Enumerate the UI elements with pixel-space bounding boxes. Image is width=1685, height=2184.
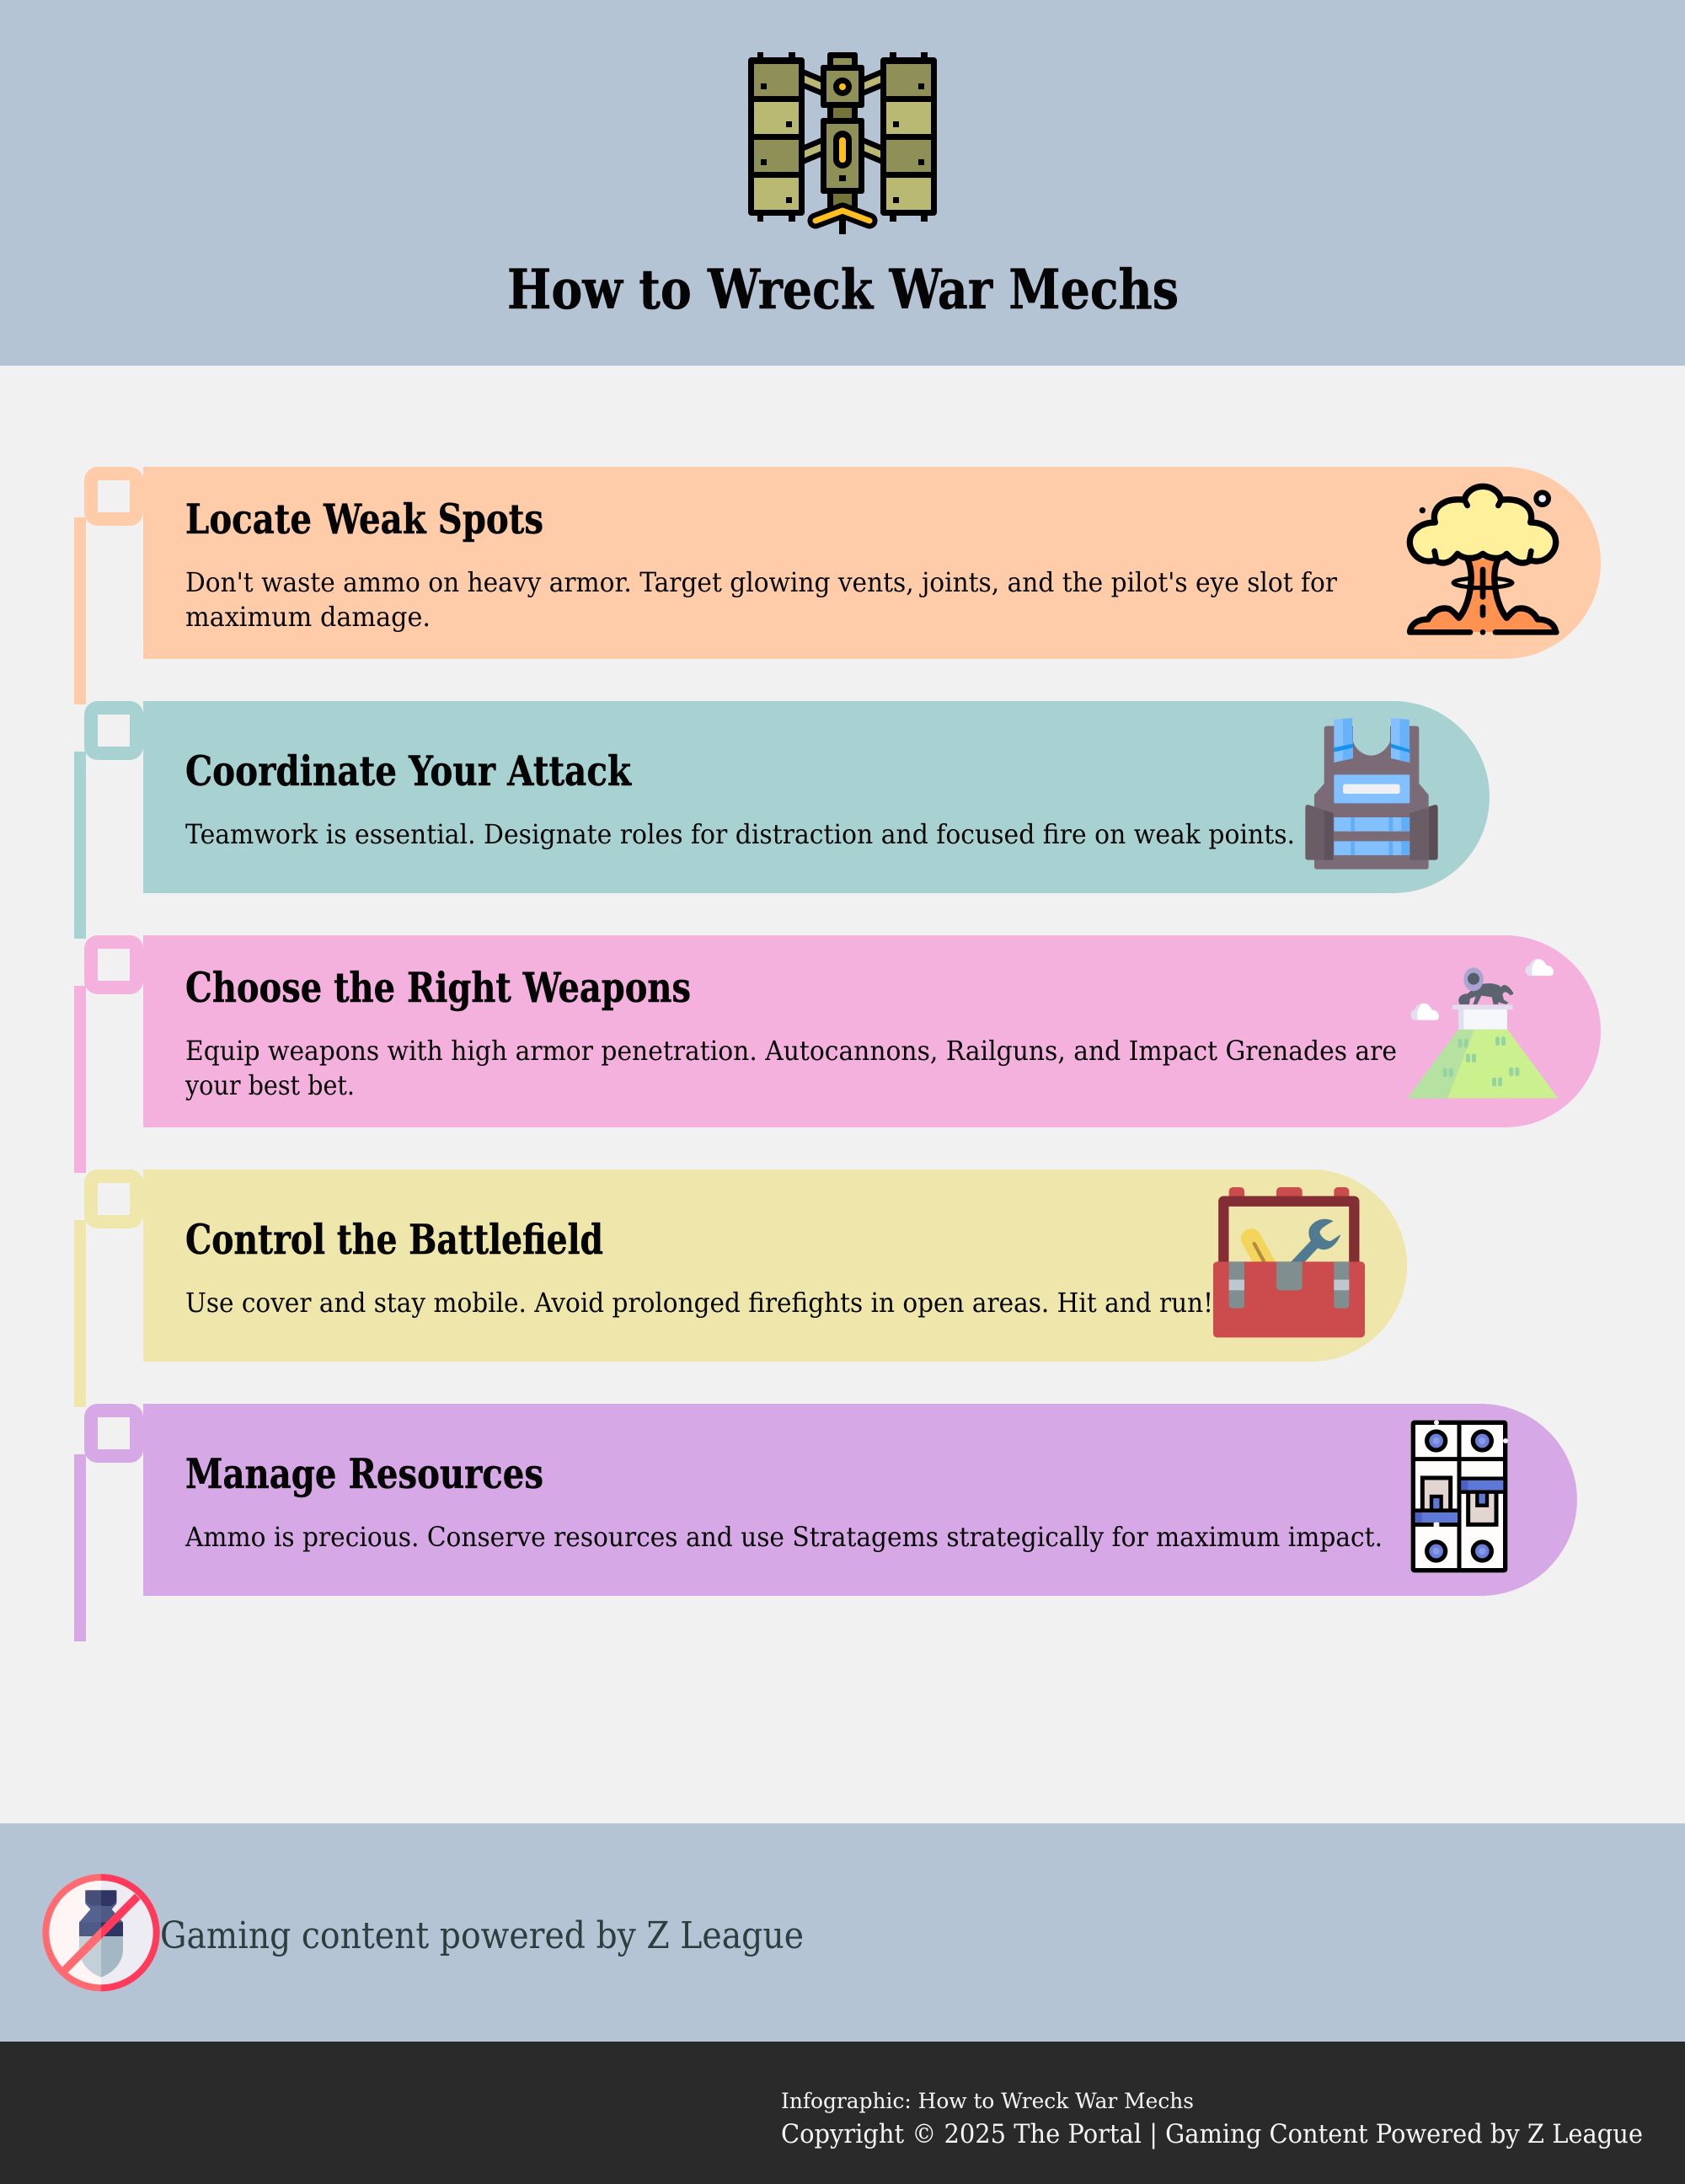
panel: locate weak spots xyxy=(74,467,1601,704)
heading: Choose the Right Weapons xyxy=(185,963,691,1012)
title: How to Wreck War Mechs xyxy=(507,258,1179,322)
copyright bar xyxy=(0,2042,1685,2184)
infographic credit: Infographic: How to Wreck War Mechs xyxy=(781,2089,1194,2113)
icon: toolbox xyxy=(1213,1187,1365,1337)
icon: hill with turret xyxy=(1408,959,1558,1098)
icon: armor vest xyxy=(1305,718,1438,870)
icon: circuit breaker xyxy=(1413,1420,1508,1571)
heading: Locate Weak Spots xyxy=(185,495,543,543)
step marker xyxy=(84,1404,143,1463)
heading: Control the Battlefield xyxy=(185,1215,603,1264)
heading: Manage Resources xyxy=(185,1449,543,1498)
heading: Coordinate Your Attack xyxy=(185,747,632,795)
panel: control the battlefield xyxy=(74,1170,1407,1407)
description: Equip weapons with high armor penetration. Autocannons, Railguns, and Impact Grenades are xyxy=(185,1035,1397,1067)
step marker xyxy=(84,701,143,760)
panel: coordinate your attack xyxy=(74,701,1490,939)
icon: satellite mech xyxy=(748,52,937,234)
copyright text: Copyright © 2025 The Portal | Gaming Content Powered by Z League xyxy=(781,2119,1643,2149)
description: Ammo is precious. Conserve resources and use Stratagems strategically for maximum impact. xyxy=(185,1521,1383,1553)
icon: mushroom cloud xyxy=(1410,486,1556,635)
header band xyxy=(0,0,1685,366)
description: Don't waste ammo on heavy armor. Target glowing vents, joints, and the pilot's eye slot for xyxy=(185,566,1338,598)
description: Use cover and stay mobile. Avoid prolonged firefights in open areas. Hit and run! xyxy=(185,1287,1213,1319)
step marker xyxy=(84,467,143,526)
footer band xyxy=(0,1823,1685,2042)
description: Teamwork is essential. Designate roles for distraction and focused fire on weak points. xyxy=(185,818,1295,850)
icon: banned bomb xyxy=(42,1874,160,1991)
description: maximum damage. xyxy=(185,601,431,633)
footer tagline: Gaming content powered by Z League xyxy=(160,1914,804,1957)
panel: manage resources xyxy=(74,1404,1577,1641)
panel: choose the right weapons xyxy=(74,935,1601,1173)
step marker xyxy=(84,1170,143,1228)
step marker xyxy=(84,935,143,994)
description: your best bet. xyxy=(185,1069,355,1101)
